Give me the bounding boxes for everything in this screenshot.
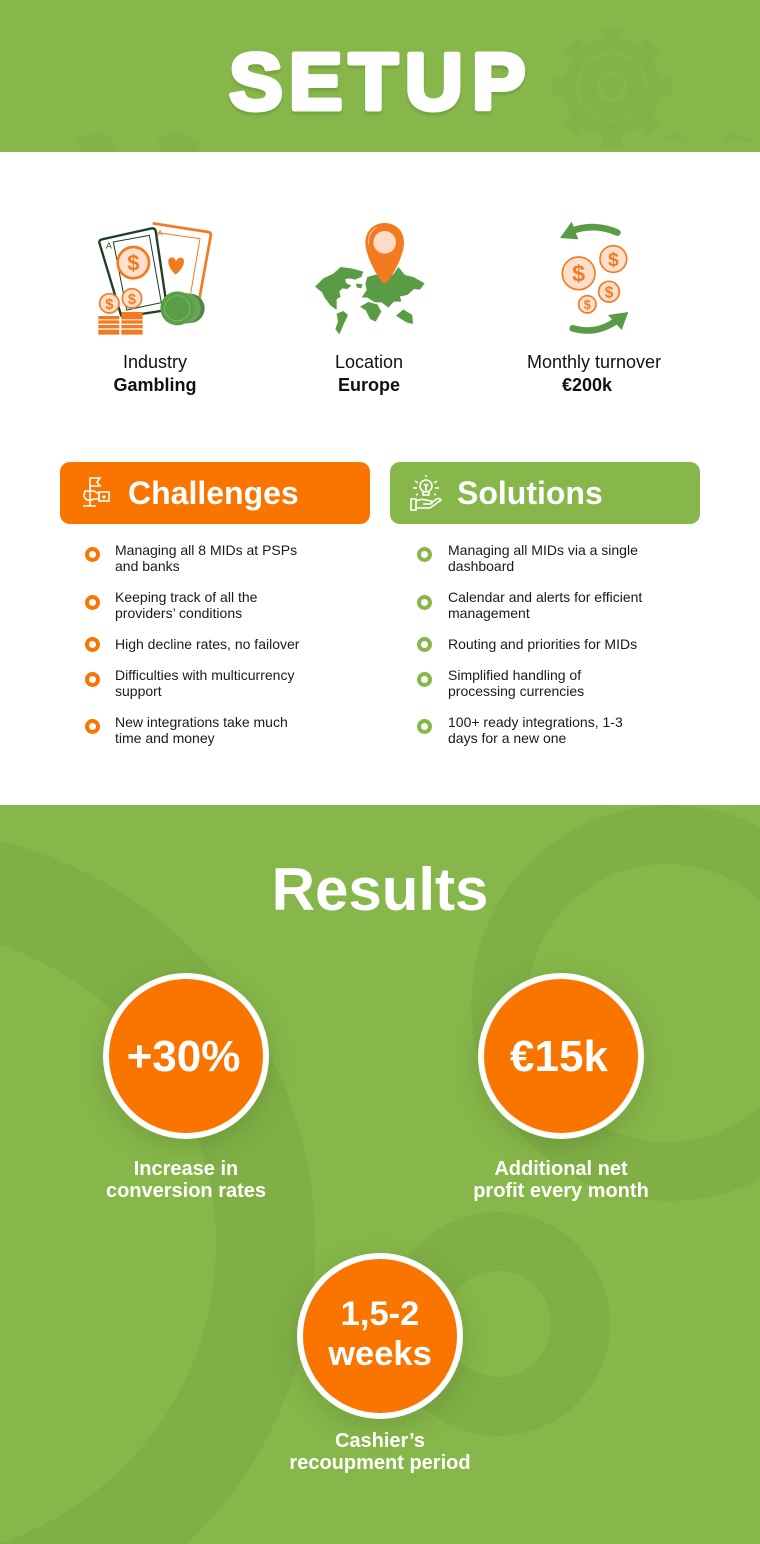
item: providers’ conditions bbox=[115, 605, 242, 621]
item bbox=[417, 714, 623, 746]
stat: recoupment: 1,5-2 bbox=[341, 1295, 419, 1333]
icon: cards and chips: A bbox=[106, 241, 112, 251]
decorative gears bbox=[0, 0, 760, 152]
caption: conversion: conversion rates bbox=[106, 1180, 266, 1202]
icon: cards and chips: $ bbox=[127, 251, 139, 276]
stat: recoupment bbox=[297, 1253, 463, 1419]
caption: recoupment: Cashier’s bbox=[335, 1430, 425, 1452]
label: monthly turnover: Monthly turnover bbox=[527, 352, 661, 372]
item: Simplified handling of bbox=[448, 667, 581, 683]
icon: cards and chips bbox=[98, 222, 212, 335]
icon: flag bbox=[83, 477, 110, 507]
results heading: Results bbox=[272, 856, 488, 923]
item bbox=[85, 714, 288, 746]
item: High decline rates, no failover bbox=[115, 636, 299, 652]
item: Managing all 8 MIDs at PSPs bbox=[115, 542, 297, 558]
heading text: Solutions bbox=[457, 475, 603, 511]
item bbox=[417, 667, 584, 699]
icon: currency circulation: $ bbox=[572, 261, 585, 287]
stat: profit: €15k bbox=[510, 1032, 608, 1081]
item: processing currencies bbox=[448, 683, 584, 699]
label: location: Location bbox=[335, 352, 403, 372]
item: 100+ ready integrations, 1-3 bbox=[448, 714, 623, 730]
item bbox=[417, 589, 642, 621]
item: days for a new one bbox=[448, 730, 566, 746]
item: time and money bbox=[115, 730, 215, 746]
caption: profit: profit every month bbox=[473, 1180, 649, 1202]
caption: conversion: Increase in bbox=[134, 1158, 238, 1180]
item: Difficulties with multicurrency bbox=[115, 667, 294, 683]
icon: cards and chips: A bbox=[157, 229, 163, 238]
caption: recoupment: recoupment period bbox=[289, 1452, 471, 1474]
item: and banks bbox=[115, 558, 180, 574]
heading text: Challenges bbox=[128, 475, 299, 511]
icon: currency circulation: $ bbox=[605, 284, 614, 301]
stat: conversion bbox=[103, 973, 269, 1139]
item: Calendar and alerts for efficient bbox=[448, 589, 642, 605]
item bbox=[417, 542, 638, 574]
item: support bbox=[115, 683, 162, 699]
panel: results bbox=[0, 805, 760, 1544]
caption: profit: Additional net bbox=[494, 1158, 628, 1180]
panel: solutions heading bbox=[390, 462, 700, 524]
title: SETUP bbox=[229, 37, 525, 126]
label: location bbox=[335, 352, 403, 395]
label: industry: Gambling bbox=[113, 375, 196, 395]
stat: recoupment: weeks bbox=[328, 1335, 432, 1373]
icon: idea in hand bbox=[410, 475, 442, 511]
stat: conversion: +30% bbox=[127, 1032, 240, 1081]
item: dashboard bbox=[448, 558, 514, 574]
item: Managing all MIDs via a single bbox=[448, 542, 638, 558]
panel: challenges heading bbox=[60, 462, 370, 524]
icon: cards and chips: $ bbox=[128, 292, 136, 308]
item: management bbox=[448, 605, 530, 621]
label: industry bbox=[113, 352, 196, 395]
label: industry: Industry bbox=[123, 352, 187, 372]
icon: currency circulation: $ bbox=[584, 298, 591, 312]
icon: currency circulation bbox=[560, 222, 628, 334]
list: solutions bbox=[417, 542, 642, 746]
label: monthly turnover bbox=[527, 352, 661, 395]
caption: recoupment bbox=[289, 1430, 471, 1474]
caption: profit bbox=[473, 1158, 649, 1202]
item bbox=[85, 589, 257, 621]
item: Keeping track of all the bbox=[115, 589, 257, 605]
icon: world map with pin bbox=[315, 223, 425, 334]
item bbox=[85, 667, 294, 699]
caption: conversion bbox=[106, 1158, 266, 1202]
icon: cards and chips: $ bbox=[105, 297, 113, 313]
header band bbox=[0, 0, 760, 152]
decorative rings bbox=[11, 822, 758, 1537]
item: Routing and priorities for MIDs bbox=[448, 636, 637, 652]
label: monthly turnover: €200k bbox=[562, 375, 612, 395]
icon: currency circulation: $ bbox=[608, 250, 619, 271]
label: location: Europe bbox=[338, 375, 400, 395]
item bbox=[85, 542, 297, 574]
list: challenges bbox=[85, 542, 300, 746]
item: New integrations take much bbox=[115, 714, 288, 730]
stat: profit bbox=[478, 973, 644, 1139]
